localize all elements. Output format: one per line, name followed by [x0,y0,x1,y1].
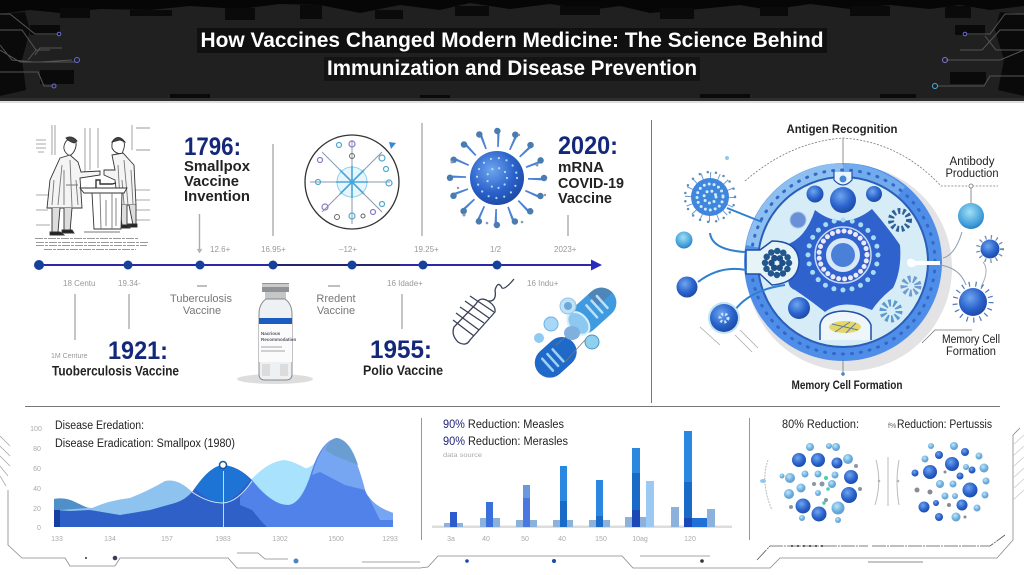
right receptor [909,261,940,265]
y axis labels: 80 [33,446,41,453]
y axis labels: 20 [33,506,41,513]
chart titles [55,420,235,450]
x axis labels: 1500 [328,536,344,543]
connector lines [698,208,986,310]
bar x axis labels: 50 [521,536,529,543]
bar x axis labels: 3a [447,536,455,543]
milestone 1955: Polio Vaccine [363,363,443,378]
milestone 1921: Tuoberculosis Vaccine [52,364,179,378]
circuit frame bottom [0,428,1024,568]
bar chart titles: 90% Reduction: Merasles [443,436,568,448]
title: Immunization and Disease Prevention [327,57,697,80]
milestone 1796: Smallpox [184,158,251,175]
timeline small date labels: 16.95+ [261,245,286,254]
x axis labels: 1293 [382,536,398,543]
grey caption rredent: Vaccine [317,305,355,317]
area layers [54,438,393,527]
cell diagram labels: Formation [946,346,996,358]
external virus particle [685,172,735,222]
panel: immune response cell diagram [676,124,1002,392]
timeline small date labels: 16 Indu+ [527,279,559,288]
title [200,29,824,80]
y axis labels: 0 [37,525,41,532]
y axis labels: 40 [33,486,41,493]
milestone 2020: mRNA [558,159,604,176]
header banner [0,0,1024,103]
external cells left [676,156,740,334]
cluster headings: Reduction: Pertussis [897,419,992,431]
timeline small date labels: –12+ [339,245,357,254]
bar chart titles: 90% Reduction: Measles [443,419,564,431]
separator marks [875,457,899,506]
milestone 2020 [558,132,624,207]
timeline small date labels: 2023+ [554,245,577,254]
timeline small date labels: 18 Centu [63,279,95,288]
icon: coronavirus [450,131,546,225]
panel: disease eradication area chart [30,420,398,543]
circuit decoration right [932,14,1024,88]
milestone 1955 [363,336,443,378]
cell diagram labels [786,124,1000,392]
y axis labels: 100 [30,426,42,433]
bar chart titles [443,419,568,459]
x axis labels: 134 [104,536,116,543]
grey caption rredent [316,293,356,317]
divider lines [25,120,1000,540]
milestone 1921 [52,337,179,378]
cell body [744,163,942,361]
timeline small date labels: 1/2 [490,245,502,254]
bubble cluster 80% [760,443,862,523]
y axis labels [30,426,42,532]
arc and callout lines [700,138,998,374]
grey caption rredent: Rredent [316,293,356,305]
cell shadow [746,165,952,371]
bubble cluster pertussis [912,442,990,522]
bars [432,431,732,528]
left pocket with dark cluster [746,241,799,285]
x axis labels: 133 [51,536,63,543]
timeline small date labels: 16 Idade+ [387,279,423,288]
illustration: two doctors engraving [36,125,150,235]
timeline small date labels: 19.34- [118,279,141,288]
title: How Vaccines Changed Modern Medicine: The Science Behind [200,29,824,52]
bar x axis labels [447,536,696,543]
cluster headings: f% [888,423,896,430]
icon: vaccine vial [237,283,313,384]
top pocket and spheres [788,172,882,319]
timeline small date labels: 12.6+ [210,245,231,254]
x axis labels: 1302 [272,536,288,543]
timeline small date labels [51,245,577,360]
timeline small date labels: 1M Centure [51,353,88,360]
icon: vaccine vial: Nacrious [261,331,281,336]
y axis labels: 60 [33,466,41,473]
chart titles: Disease Eradication: Smallpox (1980) [55,438,235,450]
icon: vaccine vial: Recommodation [261,337,297,342]
milestone 1796: 1796: [184,133,241,161]
antibody clusters in cell [883,211,918,319]
milestone 2020: COVID-19 [558,175,624,192]
milestone 1796: Vaccine [184,173,239,190]
milestone 1796 [184,133,251,205]
panel: vaccine timeline [34,123,624,384]
cell diagram labels: Memory Cell Formation [792,380,902,392]
bar x axis labels: 40 [558,536,566,543]
timeline connector lines [75,123,568,340]
icon: mRNA strand [453,279,514,344]
milestone 1921: 1921: [108,337,168,365]
timeline axis [34,260,602,270]
milestone 1796: Invention [184,188,250,205]
cluster headings: 80% Reduction: [782,419,859,431]
cell diagram labels: Production [946,168,998,180]
grey caption tuberculosis: Tuberculosis [170,293,232,305]
grey caption tuberculosis: Vaccine [183,305,221,317]
bar x axis labels: 120 [684,536,696,543]
cell diagram labels: Antibody [950,156,995,168]
bar x axis labels: 40 [482,536,490,543]
bar x axis labels: 150 [595,536,607,543]
x axis labels: 1983 [215,536,231,543]
x axis labels [51,536,398,543]
illustration caption [35,238,148,250]
icon: antigen circle diagram [305,135,399,229]
bar chart titles: data source [443,453,483,459]
bottom pocket with yellow cluster [820,311,871,340]
panel: reduction bubble clusters [760,419,992,523]
chart titles: Disease Eredation: [55,420,144,432]
external cells right [955,203,1002,320]
timeline small date labels: 19.25+ [414,245,439,254]
cell diagram labels: Antigen Recognition [786,124,898,136]
cluster headings [782,419,992,431]
milestone 1955: 1955: [370,336,432,364]
x axis labels: 157 [161,536,173,543]
grey caption tuberculosis [170,293,232,317]
panel: measles bar chart [432,419,732,543]
milestone 2020: Vaccine [558,190,612,207]
icon: mRNA capsule and nanoparticles [529,281,623,384]
bar x axis labels: 10ag [632,536,648,543]
central antigen complex [808,220,878,290]
cell diagram labels: Memory Cell [942,334,1000,346]
circuit decoration left [0,14,80,88]
milestone 2020: 2020: [558,132,618,160]
highlight marker [192,462,252,527]
